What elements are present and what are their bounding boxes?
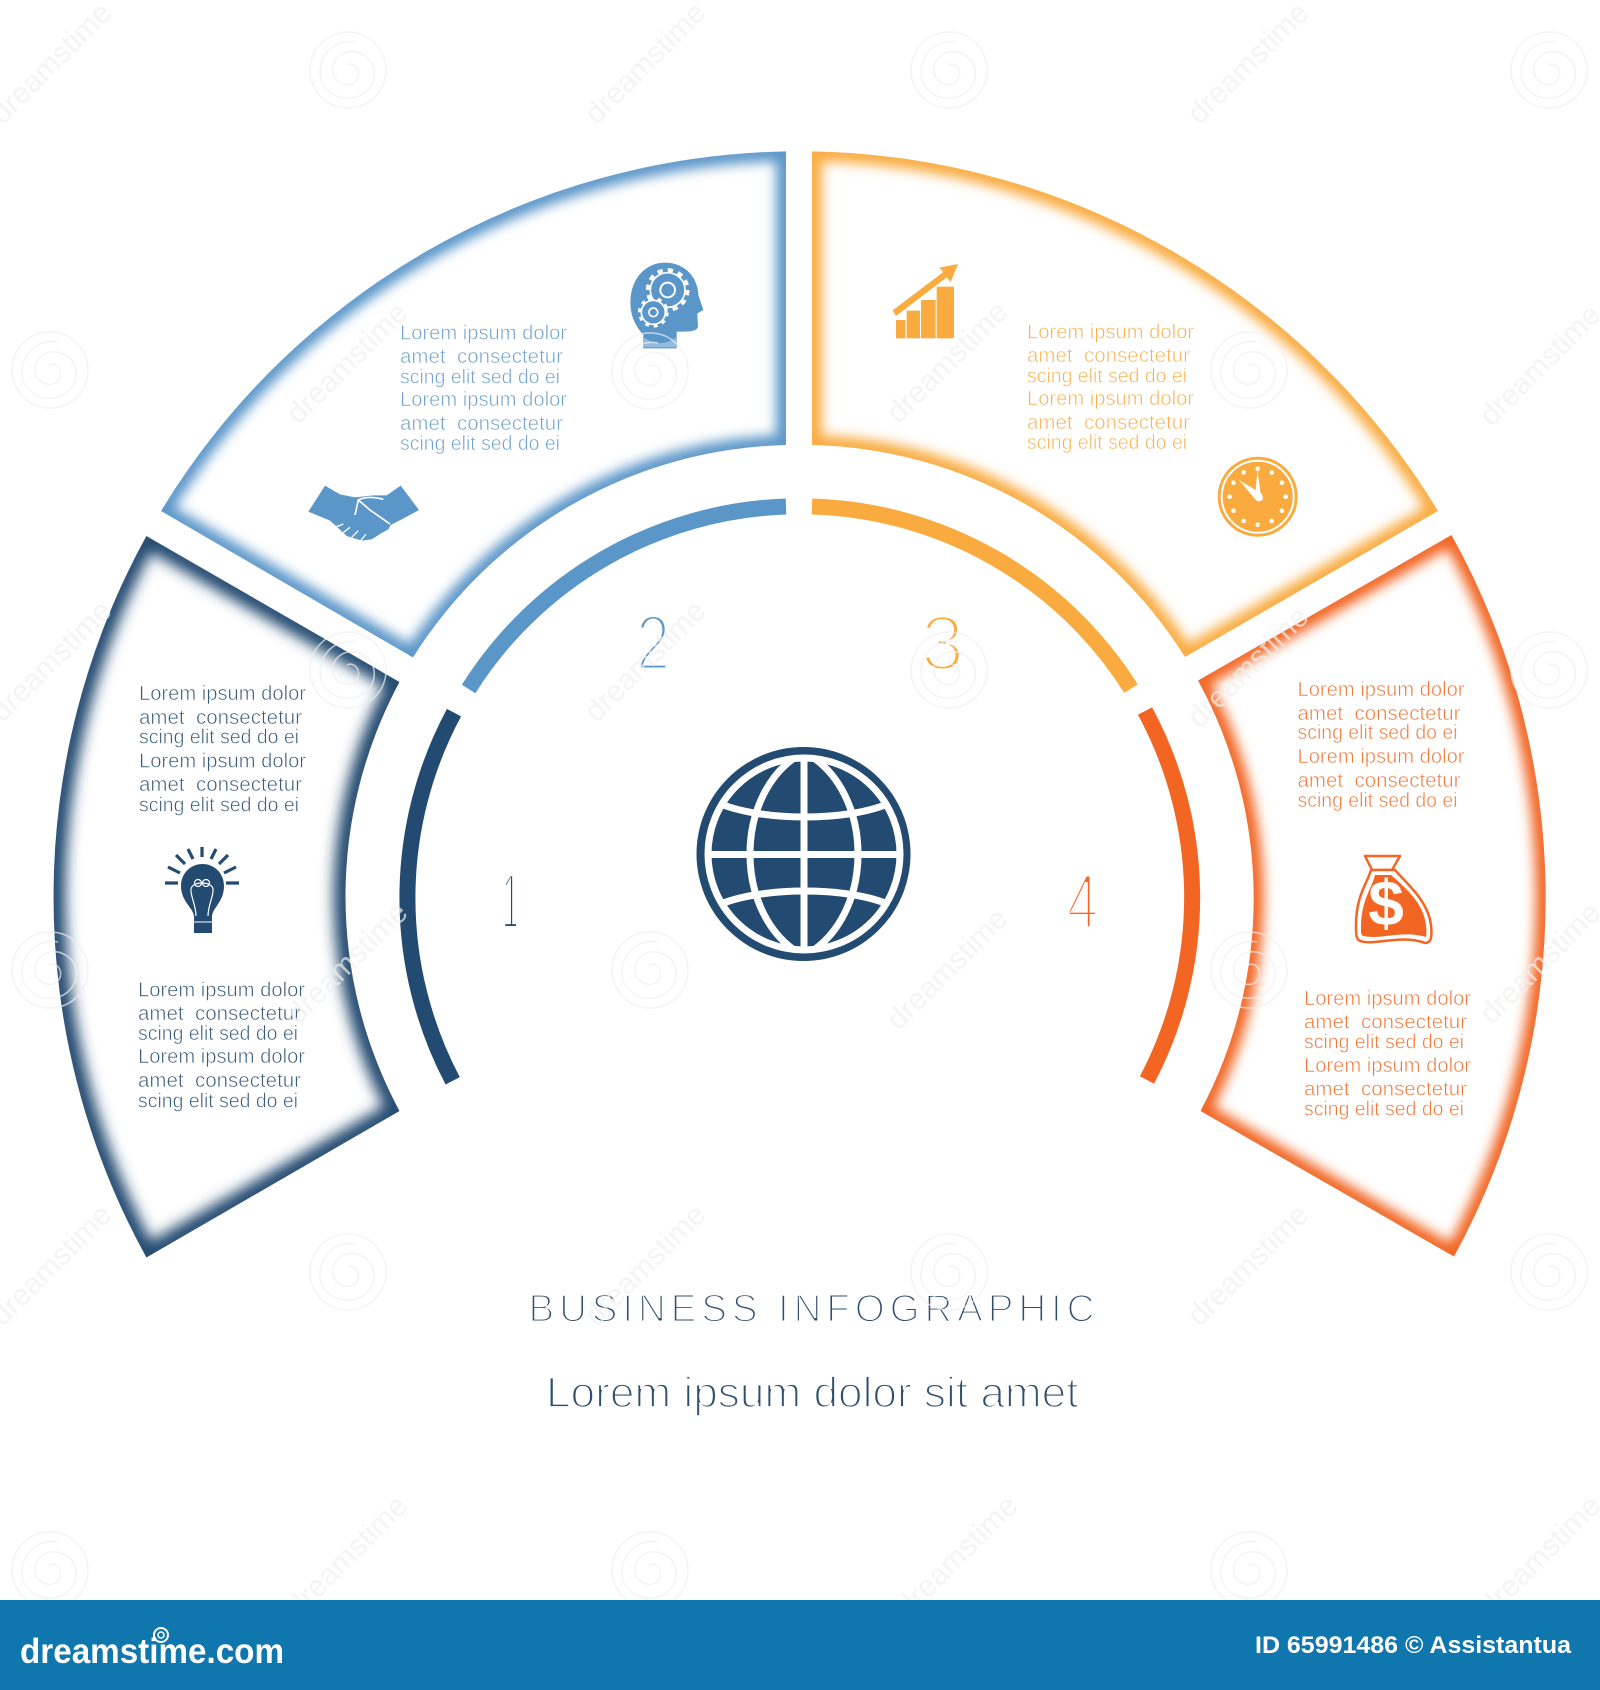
panel 4 upper text — [1298, 679, 1465, 812]
panel 3 text: amet consectetur — [1027, 345, 1190, 367]
infographic canvas: dreamstime — [280, 296, 414, 430]
panel 2: blue sector — [161, 151, 786, 658]
subtitle: Lorem ipsum dolor sit amet — [546, 1369, 1079, 1417]
number 2: 2 — [636, 598, 670, 686]
infographic canvas: dreamstime — [1181, 0, 1315, 130]
icon: globe — [696, 747, 910, 961]
ring segment 4 — [1145, 711, 1192, 1080]
footer credit: ID 65991486 © Assistantua — [1255, 1632, 1572, 1659]
ring segment 1 — [407, 713, 454, 1081]
panel 1 upper text: Lorem ipsum dolor — [139, 683, 306, 705]
icon: handshake — [308, 486, 419, 541]
panel 4 upper text: Lorem ipsum dolor — [1298, 746, 1465, 768]
panel 4 upper text: scing elit sed do ei — [1298, 790, 1458, 812]
panel 4 upper text: Lorem ipsum dolor — [1298, 679, 1465, 701]
panel 2 text: scing elit sed do ei — [400, 366, 560, 388]
panel 4 upper text: scing elit sed do ei — [1298, 722, 1458, 744]
panel 4 upper text: amet consectetur — [1298, 703, 1461, 725]
ring segment 2 — [469, 506, 786, 689]
number 3: 3 — [921, 598, 964, 686]
icon: clock — [1218, 457, 1298, 537]
panel 4: orange sector — [1198, 535, 1546, 1257]
panel 2 text: Lorem ipsum dolor — [400, 389, 567, 411]
panel 4 lower text — [1304, 988, 1471, 1121]
panel 3 text: Lorem ipsum dolor — [1027, 388, 1194, 410]
panel 1 lower text: amet consectetur — [138, 1003, 301, 1025]
panel 3 text — [1027, 322, 1194, 454]
icon: money bag: $ — [1368, 867, 1404, 939]
icon: head with gears — [630, 263, 703, 348]
panel 1 upper text: scing elit sed do ei — [139, 795, 299, 817]
infographic canvas: dreamstime — [1181, 600, 1315, 734]
panel 1 lower text — [138, 979, 305, 1112]
number 4: 4 — [1067, 857, 1098, 945]
panel 4 lower text: scing elit sed do ei — [1304, 1099, 1464, 1121]
panel 1 lower text: amet consectetur — [138, 1070, 301, 1092]
panel 1 lower text: Lorem ipsum dolor — [138, 979, 305, 1001]
panel 4 lower text: Lorem ipsum dolor — [1304, 1055, 1471, 1077]
panel 1 upper text: Lorem ipsum dolor — [139, 750, 306, 772]
infographic canvas: dreamstime — [880, 902, 1014, 1036]
panel 4 lower text: Lorem ipsum dolor — [1304, 988, 1471, 1010]
panel 1 upper text: scing elit sed do ei — [139, 727, 299, 749]
panel 4 upper text: amet consectetur — [1298, 770, 1461, 792]
panel 2 text: Lorem ipsum dolor — [400, 322, 567, 344]
panel 2 text: amet consectetur — [400, 346, 563, 368]
panel 4 lower text: amet consectetur — [1304, 1012, 1467, 1034]
infographic canvas: dreamstime — [280, 1489, 414, 1623]
panel 2 text: scing elit sed do ei — [400, 433, 560, 455]
panel 3 text: amet consectetur — [1027, 412, 1190, 434]
panel 3 text: scing elit sed do ei — [1027, 432, 1187, 454]
ring segment 3 — [812, 506, 1131, 689]
panel 3: amber sector — [812, 151, 1438, 657]
infographic canvas: dreamstime — [880, 295, 1014, 429]
icon: rising bar chart — [893, 264, 958, 338]
panel 4 lower text: amet consectetur — [1304, 1079, 1467, 1101]
panel 3 text: Lorem ipsum dolor — [1027, 322, 1194, 344]
panel 1 lower text: scing elit sed do ei — [138, 1023, 298, 1045]
panel 1 upper text: amet consectetur — [139, 707, 302, 729]
footer logo: dreamstime.com — [20, 1632, 284, 1671]
infographic canvas: dreamstime — [578, 594, 712, 728]
panel 3 text: scing elit sed do ei — [1027, 366, 1187, 388]
infographic canvas: dreamstime — [578, 0, 712, 130]
infographic canvas: dreamstime — [280, 896, 414, 1030]
panel 1 upper text — [139, 683, 306, 817]
infographic canvas: 1 — [502, 857, 520, 945]
icon: money bag — [1356, 856, 1431, 943]
icon: light bulb — [165, 847, 239, 933]
panel 1: dark blue sector — [54, 536, 400, 1258]
panel 2 text: amet consectetur — [400, 413, 563, 435]
footer band — [0, 1600, 1600, 1690]
panel 1 lower text: Lorem ipsum dolor — [138, 1046, 305, 1068]
infographic canvas: dreamstime — [578, 1198, 712, 1332]
panel 1 lower text: scing elit sed do ei — [138, 1090, 298, 1112]
panel 1 upper text: amet consectetur — [139, 774, 302, 796]
infographic canvas: dreamstime — [1181, 1198, 1315, 1332]
panel 4 lower text: scing elit sed do ei — [1304, 1032, 1464, 1054]
panel 2 text — [400, 322, 567, 455]
title: BUSINESS INFOGRAPHIC — [528, 1288, 1094, 1331]
infographic canvas: dreamstime — [890, 1489, 1024, 1623]
